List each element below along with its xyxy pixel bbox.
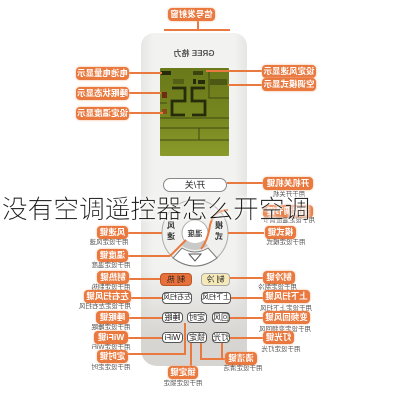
note: light key: 用于设定灯光	[262, 346, 300, 353]
label: lock key	[168, 366, 198, 379]
heat button	[160, 273, 192, 286]
power button	[163, 178, 227, 192]
label: left right swing key	[84, 290, 131, 303]
note: mode key: 用于设定模式	[266, 239, 306, 246]
airflow button: 回风	[213, 313, 229, 322]
label: lock key: 锁定键	[170, 367, 196, 377]
note: timer key: 用于设定定时	[92, 364, 130, 371]
label: fan speed display: 设定风速显示	[264, 66, 315, 76]
label: power key: 开机关机键	[267, 178, 309, 188]
directional dial	[162, 200, 228, 266]
label: light key	[263, 331, 294, 344]
label: battery display: 电池电量显示	[77, 68, 128, 78]
label: cool key	[263, 271, 295, 284]
label: up down swing key: 上下扫风键	[265, 291, 308, 301]
screen digits	[172, 88, 205, 115]
note: cool key: 用于设定制冷	[258, 284, 297, 291]
screen icons	[161, 71, 227, 114]
label: clean key	[225, 352, 257, 365]
label: light key: 灯光键	[266, 332, 291, 342]
light button: 灯光	[213, 333, 229, 342]
label: temperature key: 温度键	[100, 250, 125, 260]
power button: 开/关	[185, 180, 205, 190]
label: sleep key: 睡眠键	[100, 312, 125, 322]
label: hidden key: 温度调节键	[267, 206, 309, 216]
cool button	[201, 273, 230, 286]
note: power key: 用于开关机	[273, 191, 305, 198]
directional dial: 模	[215, 220, 223, 230]
screen dividers	[160, 71, 229, 140]
label: fan key	[97, 226, 128, 239]
note: clean key: 用于设定清洁	[224, 365, 262, 372]
label: signal window: 信号发射窗	[170, 9, 213, 19]
label: hidden key	[263, 205, 313, 218]
label: up down swing key	[263, 290, 310, 303]
note: airflow key: 用于设定变频回风	[259, 326, 311, 333]
label: heat key: 制热键	[100, 272, 126, 282]
note: lock key: 用于设定锁定	[164, 380, 202, 387]
label: left right swing key: 左右扫风键	[86, 291, 129, 301]
directional dial: 温度	[187, 228, 202, 238]
note: wifi key: 用于设定WiFi	[92, 344, 130, 351]
timer button: 定时	[189, 313, 205, 322]
swing left right button: 左右扫风	[163, 294, 191, 301]
timer button	[187, 312, 207, 323]
heat button: 制 热	[167, 275, 185, 284]
cool button: 制 冷	[206, 275, 225, 284]
swing up down button: 上下扫风	[202, 294, 230, 301]
sleep button	[162, 312, 183, 323]
label: timer key	[97, 350, 128, 363]
directional dial: 风	[167, 221, 175, 230]
note: sleep key: 用于设定睡眠	[92, 324, 130, 331]
directional dial: 式	[215, 231, 223, 241]
label: clean key: 清洁键	[228, 353, 254, 363]
label: mode display: 空调模式显示	[264, 79, 315, 89]
title: 没有空调遥控器怎么开空调	[2, 189, 310, 226]
label: airflow key: 变频回风键	[265, 312, 308, 322]
note: hidden key: 用于设定温度调节	[263, 217, 315, 224]
label: mode key: 模式键	[268, 227, 293, 237]
label: mode key	[265, 226, 296, 239]
label: sleep key	[96, 311, 129, 324]
note: fan key: 用于设定风速	[90, 239, 128, 246]
wifi button: WiFi	[164, 333, 180, 342]
label: fan key: 风速键	[100, 227, 125, 237]
label: temperature display: 设定温度显示	[77, 108, 128, 118]
brand logo: GREE 格力	[174, 49, 214, 58]
sleep button: 睡眠	[164, 313, 180, 322]
label: timer key: 定时键	[100, 351, 125, 361]
directional dial: 速	[167, 231, 175, 241]
note: temperature key: 用于设定温度	[92, 262, 130, 269]
label: temperature key	[97, 249, 128, 262]
label: heat key	[97, 271, 129, 284]
remote lower shading	[141, 270, 247, 366]
lock button: 锁定	[189, 333, 205, 342]
label: cool key: 制冷键	[266, 272, 292, 282]
label: signal window	[168, 8, 215, 21]
swing up down button	[201, 292, 231, 304]
note: heat key: 用于设定制热	[92, 284, 130, 291]
label: sleep display: 睡眠状态显示	[77, 88, 128, 98]
LCD screen	[160, 68, 229, 156]
swing left right button	[162, 292, 192, 304]
label: wifi key: WiFi键	[98, 332, 124, 342]
label: airflow key	[263, 311, 310, 324]
lock button	[187, 332, 207, 343]
note: up down swing key: 用于设定上下扫风	[260, 305, 312, 312]
note: left right swing key: 用于设定左右扫风	[79, 303, 131, 310]
wifi button	[162, 332, 183, 343]
label: power key	[263, 177, 313, 190]
label: wifi key	[94, 331, 128, 344]
remote control body	[141, 33, 247, 366]
